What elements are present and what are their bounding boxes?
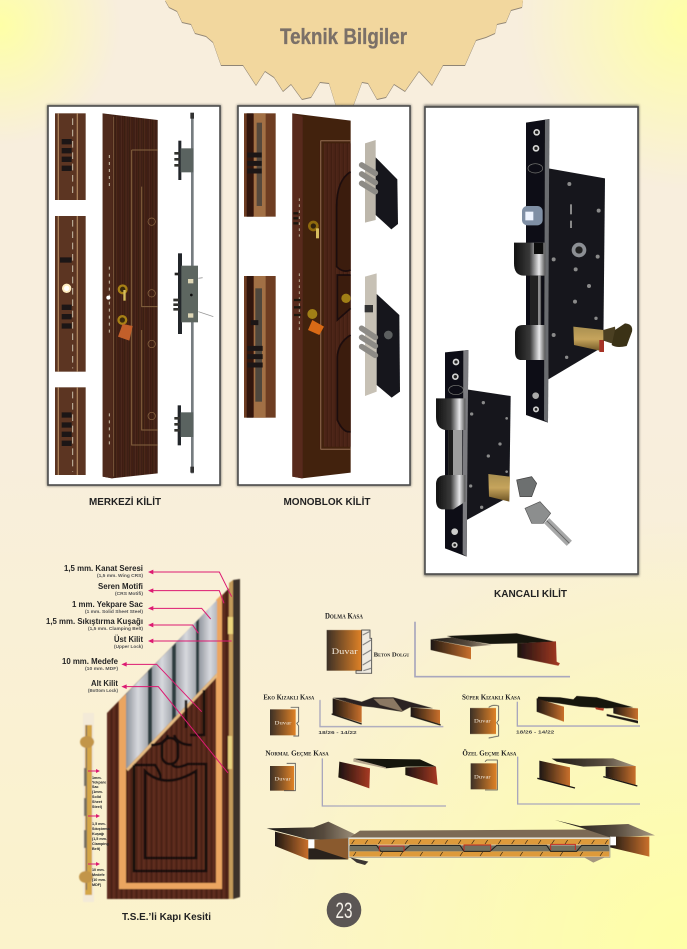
title: Teknik Bilgiler: [280, 24, 407, 49]
section strip labels: [92, 776, 111, 887]
frame headings: Duvar: [275, 776, 291, 782]
frame headings: Duvar: [275, 721, 292, 726]
callout labels: (CRS Motifi): [115, 591, 143, 596]
door leaf: [107, 579, 240, 899]
dolma kasa section: [327, 630, 372, 673]
small lock: [436, 350, 569, 557]
section strip labels: MDF): [92, 883, 102, 887]
callout labels: Seren Motifi: [98, 581, 143, 591]
page number: 23: [336, 898, 352, 923]
door: [103, 113, 158, 478]
embossed lower panel: [134, 690, 206, 871]
callout labels: (10 mm. MDF): [85, 666, 119, 671]
section strip labels: 1mm.: [92, 776, 102, 780]
callout labels: (1,5 mm. Wing CRS): [97, 573, 143, 578]
super kizakli: [470, 696, 640, 738]
frame headings: Özel Geçme Kasa: [462, 748, 517, 757]
section strip labels: Belt): [92, 847, 101, 851]
monoblock locks: [362, 140, 400, 398]
frame headings: Beton Dolgu: [374, 652, 409, 659]
section strip labels: (10 mm.: [92, 878, 106, 882]
caption: monoblok kilit: MONOBLOK KİLİT: [284, 495, 370, 508]
callout labels: (1,5 mm. Clamping Belt): [88, 626, 143, 631]
section strip labels: Medefe: [92, 873, 105, 877]
section strip labels: 1,5 mm.: [92, 822, 106, 826]
section strip: [79, 713, 94, 902]
callout labels: 1,5 mm. Kanat Seresi: [64, 563, 143, 573]
layers: frame and steel: [119, 594, 222, 889]
panel: monoblok kilit: [237, 105, 411, 486]
callout labels: Üst Kilit: [114, 634, 143, 644]
section strip arrows: [88, 769, 100, 866]
frame headings: Duvar: [474, 775, 491, 781]
callout labels: Alt Kilit: [91, 678, 118, 688]
callout labels: [46, 563, 143, 693]
section strip labels: Yekpare: [92, 780, 106, 784]
frame headings: Eko Kızaklı Kasa: [263, 692, 315, 701]
door detail strips: [55, 113, 86, 475]
ozel gecme: [471, 757, 640, 804]
header banner: [165, 0, 523, 111]
normal gecme: [270, 758, 446, 806]
section strip labels: Solid: [92, 795, 102, 799]
section strip labels: (1,5 mm.: [92, 837, 107, 841]
frame headings: 18/26 - 14/22: [516, 729, 555, 735]
panel: kancali kilit: [424, 105, 639, 576]
eko kizakli: [270, 697, 443, 736]
multipoint lock: [173, 113, 213, 473]
section strip labels: Sac: [92, 785, 99, 789]
caption: kapi kesiti: T.S.E.’li Kapı Kesiti: [122, 912, 211, 923]
frame headings: Normal Geçme Kasa: [265, 748, 329, 757]
callout labels: (1 mm. Solid Sheet Steel): [85, 609, 143, 614]
large lock: [514, 119, 632, 423]
frame cross-section: [267, 820, 655, 865]
frame profiles: [263, 611, 640, 806]
frame headings: Duvar: [474, 720, 491, 725]
section strip labels: Steel): [92, 805, 103, 809]
door detail strips: [244, 113, 276, 418]
callout labels: 10 mm. Medefe: [62, 656, 118, 666]
callout labels: 1,5 mm. Sıkıştırma Kuşağı: [46, 616, 143, 626]
page number: [327, 893, 361, 927]
section strip labels: Sheet: [92, 800, 103, 804]
frame headings: Dolma Kasa: [325, 611, 364, 620]
section strip labels: Clamping: [92, 842, 109, 846]
frame headings: 18/26 - 14/22: [318, 730, 357, 736]
caption: merkezi kilit: MERKEZİ KİLİT: [89, 495, 161, 508]
frame headings: [263, 611, 555, 782]
keys: [517, 477, 569, 543]
section strip labels: 10 mm.: [92, 868, 105, 872]
door: [292, 113, 351, 478]
frame headings: Duvar: [332, 647, 358, 656]
section strip labels: (1mm.: [92, 790, 103, 794]
section strip labels: Kuşağı: [92, 832, 104, 836]
caption: kancali kilit: KANCALI KİLİT: [494, 587, 567, 600]
dolma kasa profile: [415, 622, 570, 677]
callout labels: 1 mm. Yekpare Sac: [72, 599, 143, 609]
callout labels: (Upper Lock): [114, 644, 143, 649]
door cross-section: [46, 563, 240, 902]
panel: merkezi kilit: [47, 105, 221, 486]
frame headings: Süper Kızaklı Kasa: [462, 693, 521, 702]
section strip labels: Sıkıştırma: [92, 827, 111, 831]
labels and leader arrows: [121, 570, 232, 773]
callout labels: (Bottom Lock): [88, 688, 118, 693]
